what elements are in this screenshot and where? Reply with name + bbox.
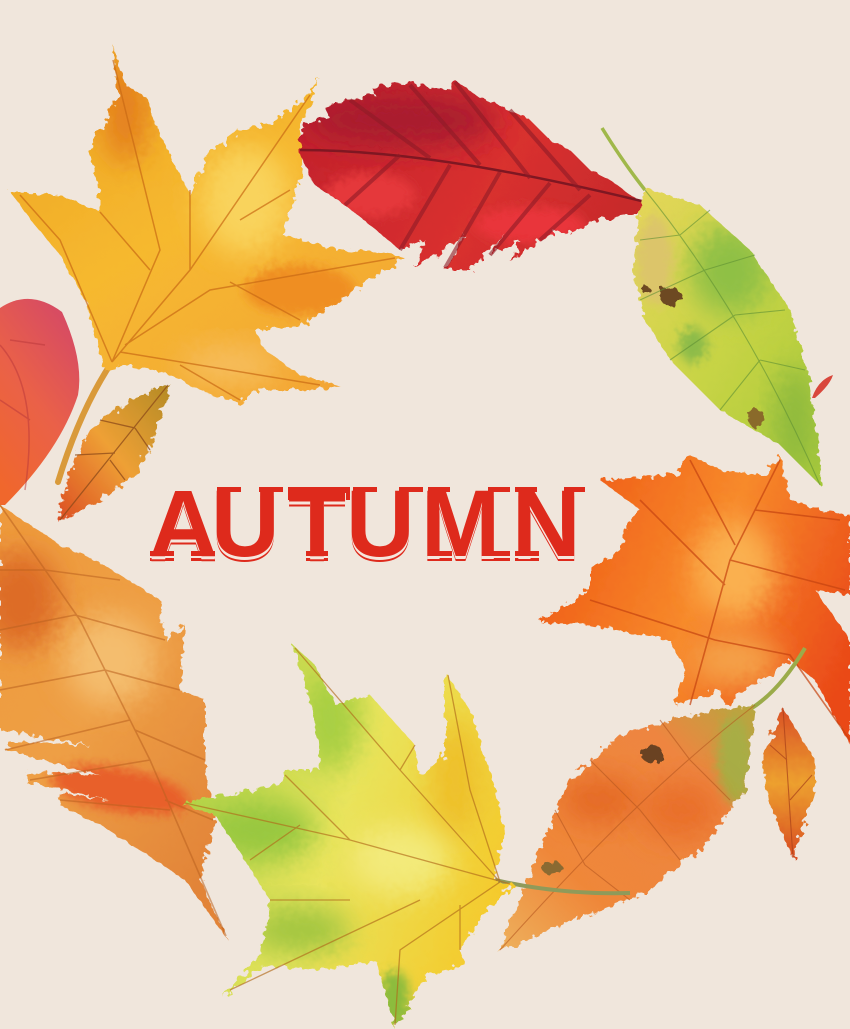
title shadow layer: AUTUMN bbox=[149, 476, 581, 582]
title letters: AUTUMN bbox=[149, 471, 581, 577]
leaf: small orange-brown bbox=[58, 383, 170, 522]
stem of yellow-green maple bbox=[495, 880, 630, 893]
title: AUTUMN bbox=[149, 471, 585, 582]
leaf: broad orange with green edge bbox=[498, 648, 805, 952]
stem of yellow maple bbox=[58, 362, 112, 482]
leaf: yellow maple bbox=[10, 45, 405, 482]
leaf: large orange left bbox=[0, 505, 228, 940]
title highlight layer: AUTUMN bbox=[149, 474, 581, 580]
leaf: crimson red bbox=[298, 80, 642, 273]
leaf: green and yellow bbox=[602, 128, 822, 487]
leaf: pink-red far left bbox=[0, 299, 79, 505]
leaf: red-orange maple bbox=[540, 455, 850, 745]
stem of green leaf bbox=[602, 128, 645, 190]
stem of broad leaf bbox=[752, 648, 805, 708]
leaf: small orange bud leaf bbox=[762, 708, 815, 858]
bud: small red tip bbox=[812, 375, 833, 398]
leaf: yellow-green maple bbox=[180, 645, 630, 1029]
